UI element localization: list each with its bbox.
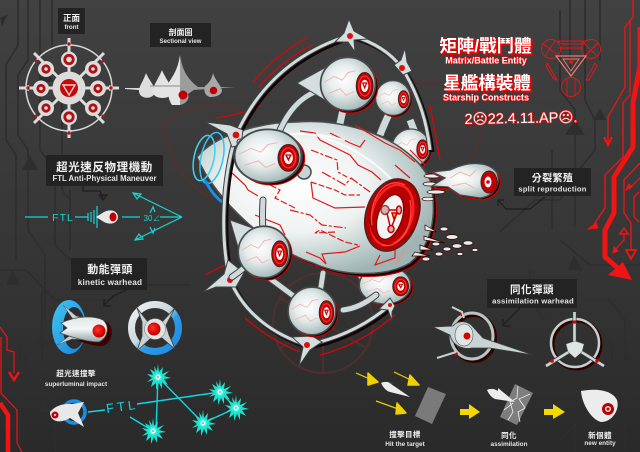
caption: assimilation (491, 430, 528, 448)
pointer arrow (498, 197, 545, 209)
pointer arrow (83, 186, 107, 200)
label: kinetic warhead: kinetic warhead (78, 278, 142, 287)
pointer arrow (104, 290, 127, 306)
pod: bottom (288, 287, 338, 337)
label: superluminal impact (45, 368, 108, 388)
yellow step arrow (460, 404, 480, 419)
body shadow and hull (200, 125, 436, 277)
frame spikes and nodes (203, 19, 412, 366)
pointer arrow (503, 308, 520, 326)
blue FTL rings at nose (189, 130, 228, 205)
superluminal impact diagram: FTL (105, 397, 139, 416)
caption: new entity: new entity (584, 440, 616, 447)
label: sectional view: 剖面圖 (168, 27, 192, 37)
front view diagram (19, 38, 119, 138)
struts behind hull (338, 100, 418, 140)
pod: left (234, 129, 311, 185)
warhead hitting the target (381, 382, 446, 424)
hull (197, 122, 433, 274)
label: split reproduction: 分裂繁殖 (532, 172, 573, 184)
title block: Starship Constructs (443, 92, 529, 102)
hull highlight lines (255, 134, 400, 190)
pod: bottom right (353, 266, 413, 306)
title block (439, 36, 533, 102)
FTL maneuver diagram: 30∠ (144, 214, 160, 223)
superluminal impact diagram (50, 364, 249, 444)
pod: upper right (376, 81, 412, 117)
kinetic warhead front view (132, 304, 178, 352)
faint red background emblem (160, 83, 481, 373)
pod struts (232, 88, 376, 310)
left red circuit (0, 327, 22, 452)
hull red circuit lines (232, 125, 425, 265)
label: superluminal impact: superluminal impact (45, 381, 108, 388)
outer frame ring (224, 35, 432, 347)
caption: hit the target (385, 429, 426, 448)
yellow incoming arrows (356, 372, 419, 414)
title block: 矩陣/戰鬥體 (441, 38, 533, 58)
right red circuit (588, 0, 640, 280)
triangle emblem (542, 40, 600, 96)
splitting fragments (412, 174, 478, 261)
title block: 星艦構裝體 (443, 73, 531, 93)
label: assimilation warhead: 同化彈頭 (510, 283, 554, 296)
warhead assimilating the target (487, 384, 533, 425)
label: FTL anti-physical maneuver: FTL Anti-Physical Maneuver (53, 174, 156, 183)
caption: assimilation: 同化 (501, 430, 517, 440)
title block: 矩陣/戰鬥體 (439, 36, 532, 56)
assimilation warhead front view (546, 312, 604, 368)
label: split reproduction (514, 168, 591, 196)
title block: Matrix/Battle Entity (445, 56, 527, 66)
title block: 星艦構裝體 (445, 74, 532, 94)
main eye (356, 172, 428, 258)
label: front: front (64, 24, 79, 31)
label: FTL anti-physical maneuver: 超光速反物理機動 (56, 160, 153, 174)
label: superluminal impact: 超光速撞擊 (56, 368, 96, 378)
label: kinetic warhead (71, 258, 147, 290)
pod: split reproduction (432, 164, 500, 200)
handwritten date: 2☹22.4.11.AP☹. (464, 109, 578, 128)
yellow step arrow (544, 404, 565, 419)
label: FTL anti-physical maneuver (46, 155, 163, 186)
caption: assimilation: assimilation (491, 441, 528, 448)
FTL maneuver diagram (25, 193, 182, 240)
label: assimilation warhead (487, 279, 577, 308)
red sketch accent lines (205, 37, 440, 355)
caption: hit the target: 撞擊目標 (389, 429, 421, 439)
main battle entity (189, 19, 478, 366)
label: sectional view (150, 23, 211, 47)
sectional view diagram (125, 55, 235, 105)
pod: lower left (230, 220, 292, 280)
label: sectional view: Sectional view (160, 38, 202, 45)
label: split reproduction: split reproduction (518, 184, 587, 194)
label: assimilation warhead: assimilation warhead (492, 296, 574, 306)
FTL maneuver diagram: FTL (52, 212, 74, 224)
caption: hit the target: Hit the target (385, 441, 426, 448)
new entity (581, 390, 618, 422)
label: kinetic warhead: 動能彈頭 (87, 262, 133, 276)
kinetic warhead side view (52, 300, 112, 354)
assimilation warhead side view (433, 307, 533, 361)
pod: top (297, 57, 378, 113)
label: front (58, 8, 85, 34)
pod: right (392, 129, 432, 169)
caption: new entity: 新個體 (588, 430, 612, 440)
caption: new entity (584, 430, 616, 447)
label: front: 正面 (63, 13, 80, 23)
